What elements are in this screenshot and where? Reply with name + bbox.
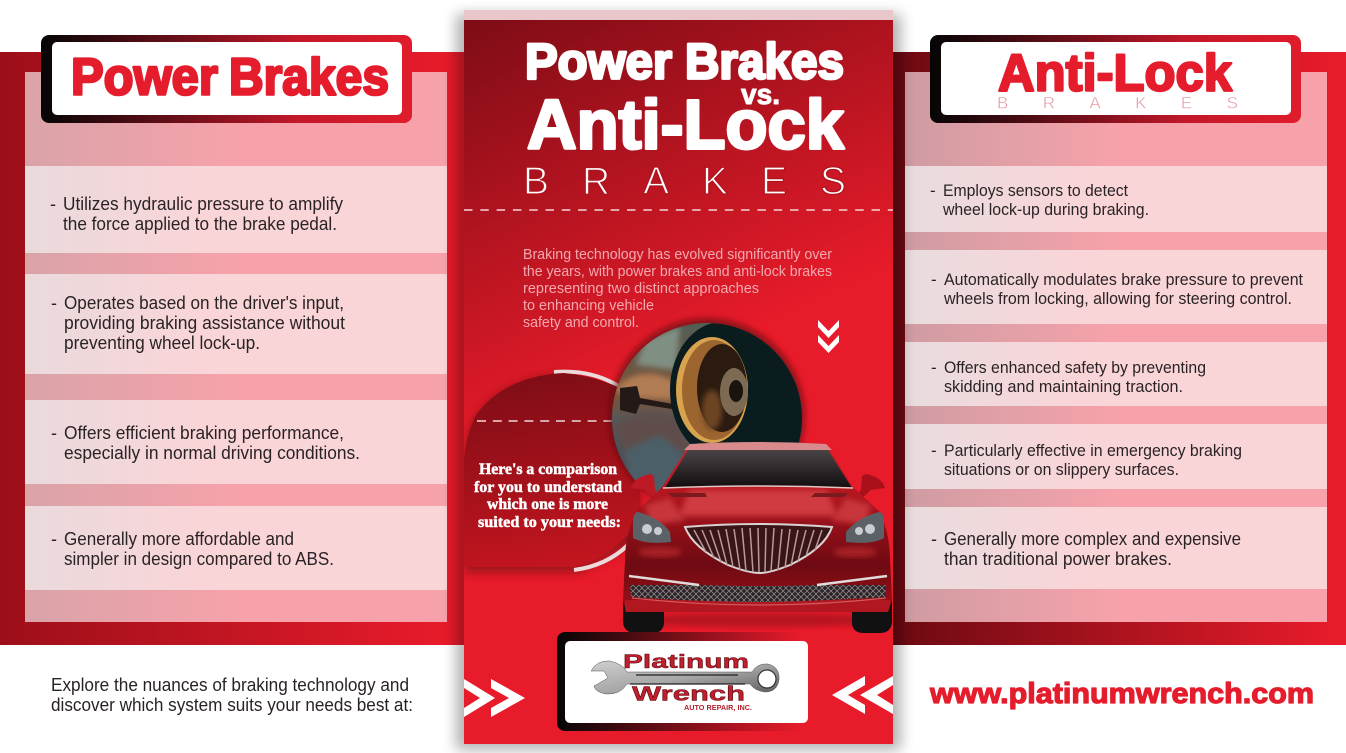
panel: center column <box>464 10 893 744</box>
list item: complex and expensive <box>905 507 1327 589</box>
footer text: explore: discover which system suits your needs best at: <box>51 695 413 715</box>
panel: left red band <box>0 52 464 645</box>
list item: enhanced safety: skidding and maintaining traction. <box>944 377 1183 396</box>
list item: sensors: - <box>930 181 936 200</box>
list item: affordable: Generally more affordable and <box>64 529 294 549</box>
list item: affordable <box>25 506 447 590</box>
list item: hydraulic pressure: the force applied to the brake pedal. <box>63 214 337 234</box>
list item: hydraulic pressure: Utilizes hydraulic pressure to amplify <box>63 194 343 214</box>
panel: anti-lock brakes <box>905 72 1327 622</box>
list item: complex and expensive: - <box>931 529 937 549</box>
list item: hydraulic pressure: - <box>50 194 56 214</box>
list item: sensors: Employs sensors to detect <box>943 181 1128 200</box>
list item: driver's input: providing braking assistance without <box>64 313 345 333</box>
heading: power brakes: Brakes <box>229 48 389 106</box>
list item: emergency braking: - <box>931 441 937 460</box>
footer website: www.platinumwrench.com <box>929 678 1314 710</box>
list item: affordable: - <box>51 529 57 549</box>
list item: driver's input: Operates based on the driver's input, <box>64 293 344 313</box>
list item: affordable: simpler in design compared to ABS. <box>64 549 334 569</box>
car tires <box>623 600 664 633</box>
title: Anti-Lock <box>527 86 844 164</box>
intro text: Braking technology has evolved significantly over <box>523 247 832 263</box>
list item: enhanced safety: Offers enhanced safety by preventing <box>944 358 1206 377</box>
list item: sensors: wheel lock-up during braking. <box>942 200 1149 219</box>
logo plate: Wrench <box>632 684 745 706</box>
list item: emergency braking: situations or on slippery surfaces. <box>944 460 1179 479</box>
car highlights <box>625 490 890 612</box>
icon: right-pointing chevrons <box>464 679 525 717</box>
callout: comparison bubble: for you to understand <box>474 479 622 496</box>
photo: spinning wheel <box>609 318 810 515</box>
intro text: safety and control. <box>523 315 639 331</box>
callout: comparison bubble <box>464 372 640 572</box>
list item: efficient performance: especially in normal driving conditions. <box>64 443 360 463</box>
panel: power brakes <box>25 72 447 622</box>
list item: driver's input: preventing wheel lock-up. <box>64 333 260 353</box>
panel: right red band <box>893 52 1346 645</box>
heading: anti-lock brakes: Anti-Lock <box>998 44 1232 102</box>
title: BRAKES <box>523 160 846 203</box>
heading: power brakes <box>41 35 412 123</box>
list item: complex and expensive: than traditional power brakes. <box>944 549 1172 569</box>
car mirrors <box>631 474 660 499</box>
callout: comparison bubble: suited to your needs: <box>478 514 621 531</box>
car grille <box>685 524 832 573</box>
car body <box>623 444 892 612</box>
logo plate: Platinum <box>623 652 749 673</box>
icon: wrench <box>591 661 779 694</box>
list item: modulates pressure: wheels from locking, allowing for steering control. <box>943 289 1292 308</box>
list item: efficient performance <box>25 400 447 484</box>
list item: emergency braking <box>905 424 1327 489</box>
title: Power <box>525 34 672 90</box>
list item: enhanced safety: - <box>931 358 937 377</box>
icon: left-pointing chevrons <box>832 676 893 714</box>
list item: complex and expensive: Generally more complex and expensive <box>944 529 1241 549</box>
logo plate: AUTO REPAIR, INC. <box>684 703 752 712</box>
intro text: the years, with power brakes and anti-lock brakes <box>523 264 832 280</box>
icon: double chevron down <box>818 320 839 353</box>
intro text: representing two distinct approaches <box>523 281 759 297</box>
list item: driver's input: - <box>51 293 57 313</box>
list item: sensors <box>905 166 1327 232</box>
list item: efficient performance: - <box>51 423 57 443</box>
list item: modulates pressure: - <box>931 270 937 289</box>
footer text: explore: Explore the nuances of braking technology and <box>51 675 409 695</box>
heading: power brakes: Power <box>71 48 218 106</box>
list item: enhanced safety <box>905 342 1327 406</box>
intro text: to enhancing vehicle <box>523 298 654 314</box>
car bumper grille <box>630 585 886 602</box>
title <box>523 34 846 203</box>
callout: comparison bubble: which one is more <box>487 496 608 513</box>
callout: comparison bubble: Here's a comparison <box>479 461 617 478</box>
footer text: explore <box>51 675 413 715</box>
title: Brakes <box>685 34 844 90</box>
car headlights <box>633 512 671 543</box>
list item: modulates pressure <box>905 250 1327 324</box>
list item: efficient performance: Offers efficient braking performance, <box>64 423 344 443</box>
logo plate <box>557 632 808 731</box>
heading: anti-lock brakes <box>930 35 1301 123</box>
illustration: red car <box>623 442 893 633</box>
heading: anti-lock brakes: BRAKES <box>997 94 1238 112</box>
list item: driver's input <box>25 274 447 374</box>
car windshield <box>665 450 852 488</box>
intro text <box>523 247 832 331</box>
list item: hydraulic pressure <box>25 166 447 253</box>
center column shadow <box>456 14 901 750</box>
list item: emergency braking: Particularly effective in emergency braking <box>944 441 1242 460</box>
title: vs. <box>741 79 780 111</box>
list item: modulates pressure: Automatically modulates brake pressure to prevent <box>944 270 1303 289</box>
